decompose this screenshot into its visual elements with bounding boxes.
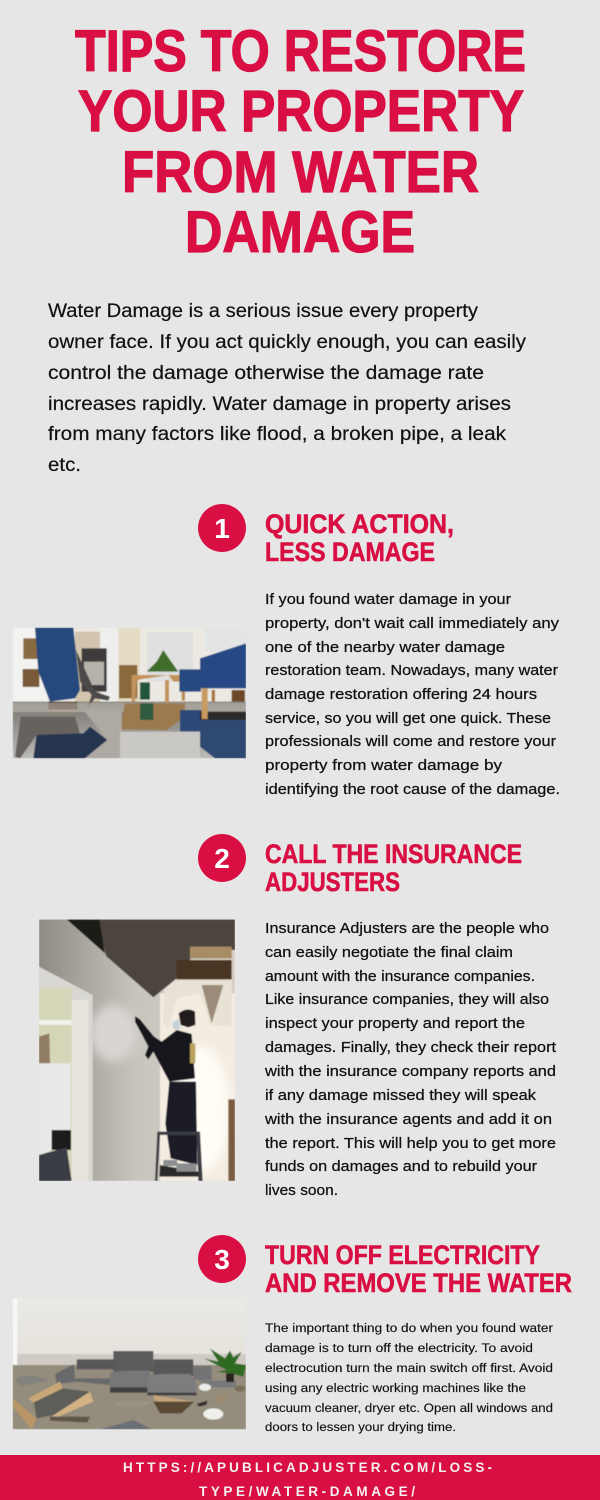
section 1: body text bbox=[265, 592, 560, 798]
section 2: body text: Like insurance companies, they will also bbox=[265, 992, 549, 1008]
section 1: heading: LESS DAMAGE bbox=[265, 537, 435, 567]
intro paragraph: increases rapidly. Water damage in property arises bbox=[48, 394, 511, 415]
section 2: body text bbox=[264, 921, 556, 1199]
section 3: heading: TURN OFF ELECTRICITY bbox=[265, 1240, 540, 1270]
section 2: heading: CALL THE INSURANCE bbox=[265, 839, 522, 869]
section 1: body text: property from water damage by bbox=[265, 758, 503, 774]
section 2: heading bbox=[265, 839, 522, 897]
section 1: number badge: 1 bbox=[214, 513, 230, 544]
section 1: body text: If you found water damage in your bbox=[265, 592, 511, 608]
section 2: body text: damages. Finally, they check their report bbox=[265, 1040, 556, 1056]
section 2: heading: ADJUSTERS bbox=[265, 867, 400, 897]
section 2: body text: if any damage missed they will speak bbox=[265, 1088, 537, 1104]
section 2: body text: funds on damages and to rebuild your bbox=[265, 1159, 537, 1175]
title: FROM WATER bbox=[122, 141, 479, 205]
section 2: body text: Insurance Adjusters are the people who bbox=[265, 921, 549, 937]
section 1: body text: service, so you will get one quick. These bbox=[265, 711, 551, 727]
section 3: heading: AND REMOVE THE WATER bbox=[265, 1268, 572, 1298]
section 3: body text: The important thing to do when you found water bbox=[265, 1321, 553, 1335]
intro paragraph: Water Damage is a serious issue every property bbox=[48, 301, 479, 322]
section 2: body text: lives soon. bbox=[265, 1183, 338, 1199]
footer banner with website link: TYPE/WATER-DAMAGE/ bbox=[199, 1484, 415, 1499]
intro paragraph bbox=[48, 301, 527, 476]
section 3: photo of a flooded living room with grey sofa bbox=[13, 1298, 246, 1429]
intro paragraph: owner face. If you act quickly enough, you can easily bbox=[48, 332, 527, 353]
section 3: body text: using any electric working machines like the bbox=[265, 1381, 526, 1395]
section 1: body text: property, don't wait call immediately any bbox=[265, 616, 560, 632]
section 3: number badge: 3 bbox=[214, 1244, 230, 1275]
section 1: number badge bbox=[198, 504, 246, 552]
section 2: number badge bbox=[198, 834, 246, 882]
section 3: body text: vacuum cleaner, dryer etc. Open all windows and bbox=[265, 1401, 553, 1415]
title: YOUR PROPERTY bbox=[78, 80, 524, 144]
section 2: body text: with the insurance agents and add it on bbox=[264, 1112, 552, 1128]
section 3: body text: doors to lessen your drying time. bbox=[265, 1420, 456, 1434]
section 3: body text bbox=[265, 1321, 553, 1434]
footer banner with website link bbox=[0, 1455, 600, 1500]
section 3: body text: damage is to turn off the electricity. To avoid bbox=[265, 1341, 533, 1355]
section 1: photo of technician extracting water from a flooded living room bbox=[13, 628, 246, 758]
section 2: body text: inspect your property and report the bbox=[265, 1016, 525, 1032]
section 1: body text: one of the nearby water damage bbox=[265, 640, 505, 656]
section 1: heading bbox=[265, 509, 454, 567]
section 2: photo of worker on a step ladder cutting a damaged wall bbox=[39, 919, 235, 1181]
section 3: heading bbox=[265, 1240, 572, 1298]
section 2: body text: the report. This will help you to get more bbox=[265, 1136, 556, 1152]
section 1: body text: restoration team. Nowadays, many water bbox=[265, 663, 558, 679]
section 2: body text: amount with the insurance companies. bbox=[265, 969, 535, 985]
title bbox=[75, 20, 526, 265]
section 3: number badge bbox=[198, 1235, 246, 1283]
section 1: body text: professionals will come and restore your bbox=[265, 734, 556, 750]
footer banner with website link: HTTPS://APUBLICADJUSTER.COM/LOSS- bbox=[123, 1460, 492, 1475]
section 2: body text: can easily negotiate the final claim bbox=[265, 945, 513, 961]
section 1: body text: identifying the root cause of the damage. bbox=[265, 782, 560, 798]
title: DAMAGE bbox=[185, 201, 415, 265]
intro paragraph: control the damage otherwise the damage rate bbox=[48, 363, 484, 384]
intro paragraph: etc. bbox=[48, 455, 81, 476]
section 1: heading: QUICK ACTION, bbox=[265, 509, 454, 539]
section 2: body text: with the insurance company reports and bbox=[264, 1064, 556, 1080]
intro paragraph: from many factors like flood, a broken pipe, a leak bbox=[48, 424, 507, 445]
section 1: body text: damage restoration offering 24 hours bbox=[265, 687, 537, 703]
title: TIPS TO RESTORE bbox=[75, 20, 526, 84]
section 3: body text: electrocution turn the main switch off first. Avoid bbox=[265, 1361, 553, 1375]
section 2: number badge: 2 bbox=[214, 843, 230, 874]
